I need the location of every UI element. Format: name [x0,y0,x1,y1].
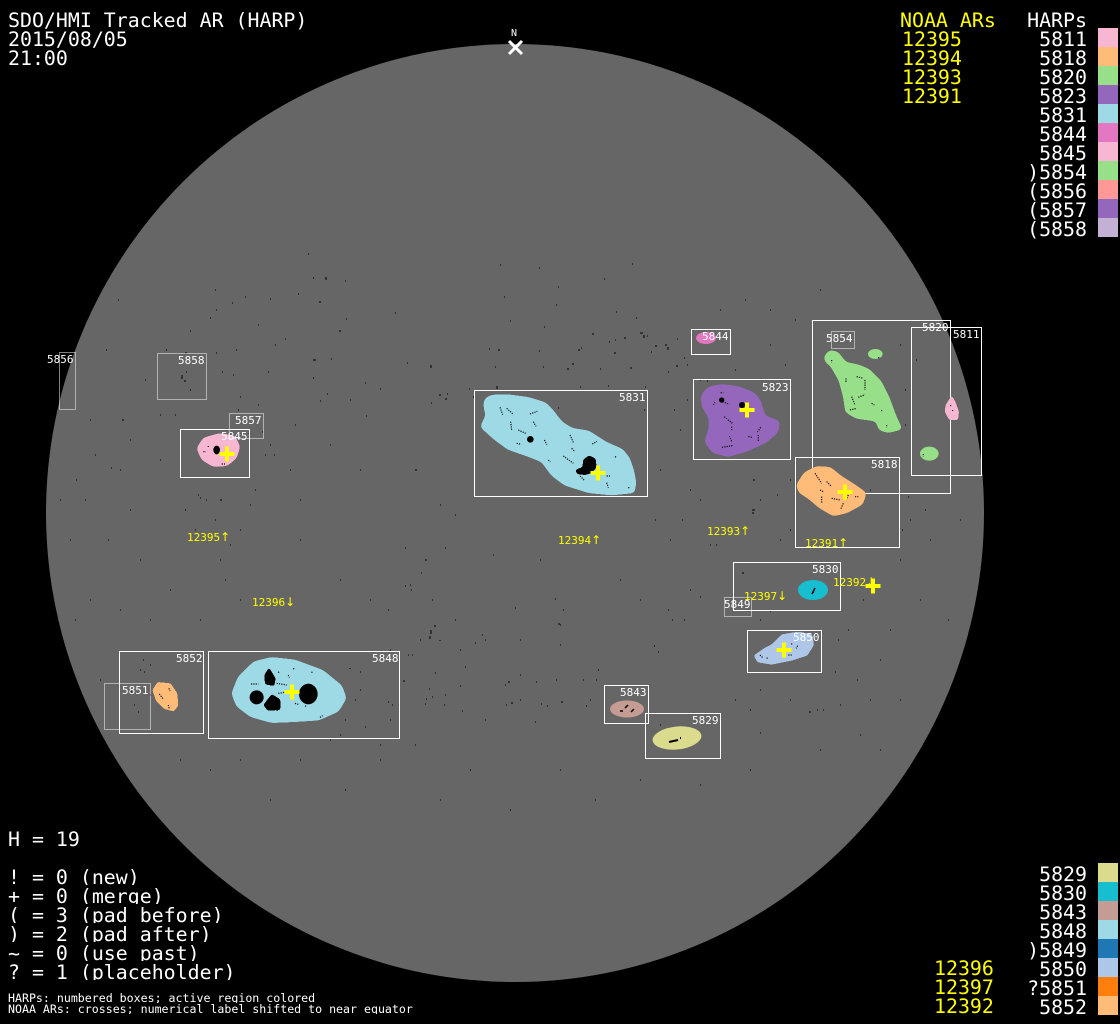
label 5829: 5829 [692,714,718,727]
title block: SDO/HMI Tracked AR (HARP) [8,9,307,32]
box 5820 [812,320,950,494]
label 12396: 12396↓ [252,595,295,609]
status key [8,866,236,984]
box 5823 [694,380,790,460]
panel: HARP 5829 [646,714,720,758]
active region 5845 [196,433,240,467]
small magnetic specks scattered over the disk [60,254,961,810]
panel: HARP 5854 [826,332,854,348]
HARPs list bottom: )5849 [1027,939,1087,962]
label 12397: 12397↓ [744,589,787,603]
box 5843 [604,686,648,724]
title block: 21:00 [8,47,68,70]
HARPs list bottom: 5843 [1039,901,1087,924]
label 5856: 5856 [47,353,74,366]
HARPs list bottom [1027,863,1087,1019]
active region 5811 [945,395,959,420]
panel: HARP 5851 [104,684,150,730]
panel: HARP 5849 [724,598,752,616]
status key: ( = 3 (pad before) [8,904,224,927]
box 5858 [158,354,206,400]
colour swatches bottom [1098,863,1118,1015]
label 5858: 5858 [178,354,204,367]
active region 5850 [754,632,814,665]
box 5854 [832,332,854,348]
label 5831: 5831 [619,391,646,404]
HARPs list top [1027,9,1087,241]
panel: HARP 5845 [180,430,250,478]
north marker [509,28,522,54]
panel: HARP 5811 [912,328,982,476]
panel: HARP 5830 [734,562,840,610]
box 5811 [912,328,982,476]
solar disk [46,44,984,982]
NOAA ARs list top: 12394 [902,47,962,70]
panel: HARP 5831 [474,390,648,496]
panel: HARP 5858 [158,354,206,400]
active region 5852 [152,682,178,711]
NOAA ARs list bottom: 12397 [934,976,994,999]
active region 5820 [824,349,939,461]
label 5830: 5830 [812,563,838,576]
HARPs list bottom: 5830 [1039,882,1087,905]
box 5856 [60,352,76,410]
active region 5848 [231,657,347,723]
active region 5830 [798,580,828,600]
panel: HARP 5844 [692,330,730,354]
active region 5823 [701,384,780,457]
footnote: HARPs: numbered boxes; active region colored [8,991,315,1005]
NOAA ARs list top [900,9,996,108]
active region 5829 [651,724,703,752]
label 5852: 5852 [176,652,202,665]
box 5831 [474,390,648,496]
label 5844: 5844 [702,330,729,343]
box 5857 [230,414,264,438]
status key: ? = 1 (placeholder) [8,961,236,984]
NOAA ARs list top: 12391 [902,85,962,108]
label 5818: 5818 [871,458,898,471]
box 5830 [734,562,840,610]
label 5850: 5850 [793,631,820,644]
HARPs list top: 5811 [1039,28,1087,51]
label 5849: 5849 [724,598,750,611]
label 12394: 12394↑ [558,533,601,547]
label 12391: 12391↑ [805,536,848,550]
label 12392: 12392↓ [833,575,876,589]
HARPs list top: 5831 [1039,104,1087,127]
label 5820: 5820 [922,321,948,334]
label 5843: 5843 [620,686,646,699]
label 5848: 5848 [372,652,398,665]
HARPs list bottom: 5829 [1039,863,1087,886]
active region 5818 [796,466,867,516]
NOAA ARs list top: NOAA ARs [900,9,996,32]
HARPs list top: 5818 [1039,47,1087,70]
status key: ~ = 0 (use past) [8,942,200,965]
box 5849 [724,598,752,616]
sunspots 5830 [812,588,815,594]
box 5848 [208,652,400,738]
icon: north cross [509,41,522,54]
panel: HARP 5823 [694,380,790,460]
H count: H = 19 [8,828,80,851]
HARPs list bottom: ?5851 [1027,977,1087,1000]
colour swatches top [1098,28,1118,237]
box 5818 [796,458,900,548]
panel: HARP 5850 [748,630,822,672]
HARPs list top: HARPs [1027,9,1087,32]
label 5851: 5851 [122,684,148,697]
NOAA ARs list bottom: 12392 [934,995,994,1018]
label 5854: 5854 [826,332,853,345]
footnote [8,993,412,1014]
status key: ! = 0 (new) [8,866,140,889]
HARPs list bottom: 5850 [1039,958,1087,981]
panel: HARP 5843 [604,686,648,724]
panel: HARP 5820 [812,320,950,494]
HARPs list top: 5845 [1039,142,1087,165]
panel: HARP 5856 [47,352,76,410]
label 5845: 5845 [221,430,248,443]
box 5844 [692,330,730,354]
box 5851 [104,684,150,730]
active region 5843 [610,700,644,718]
sunspots 5829 [669,738,681,742]
label 5823: 5823 [762,381,788,394]
HARPs list bottom: 5852 [1039,996,1087,1019]
label 5811: 5811 [953,328,980,341]
HARPs list top: (5856 [1027,180,1087,203]
HARPs list bottom: 5848 [1039,920,1087,943]
label 12395: 12395↑ [187,530,230,544]
title block: 2015/08/05 [8,28,128,51]
HARPs list top: 5844 [1039,123,1087,146]
footnote: NOAA ARs: crosses; numerical label shifted to near equator [8,1002,413,1016]
HARPs list top: 5823 [1039,85,1087,108]
active region 5831 [480,394,636,495]
status key: + = 0 (merge) [8,885,164,908]
box 5845 [180,430,250,478]
NOAA ARs list bottom [934,957,994,1018]
N label: N [511,28,517,39]
NOAA AR labels [187,524,876,609]
box 5852 [120,652,204,734]
active region 5844 [696,332,716,344]
HARPs list top: )5854 [1027,161,1087,184]
NOAA AR crosses [220,402,880,700]
status key: ) = 2 (pad after) [8,923,212,946]
panel: HARP 5852 [120,652,204,734]
NOAA ARs list top: 12393 [902,66,962,89]
HARPs list top: (5858 [1027,218,1087,241]
label 5857: 5857 [235,414,262,427]
panel: HARP 5818 [796,458,900,548]
box 5850 [748,630,822,672]
HARPs list top: 5820 [1039,66,1087,89]
panel: HARP 5857 [230,414,264,438]
sunspots 5843 [620,705,634,712]
box 5829 [646,714,720,758]
NOAA ARs list bottom: 12396 [934,957,994,980]
panel: HARP 5848 [208,652,400,738]
label 12393: 12393↑ [707,524,750,538]
NOAA ARs list top: 12395 [902,28,962,51]
HARPs list top: (5857 [1027,199,1087,222]
title block [8,9,307,70]
